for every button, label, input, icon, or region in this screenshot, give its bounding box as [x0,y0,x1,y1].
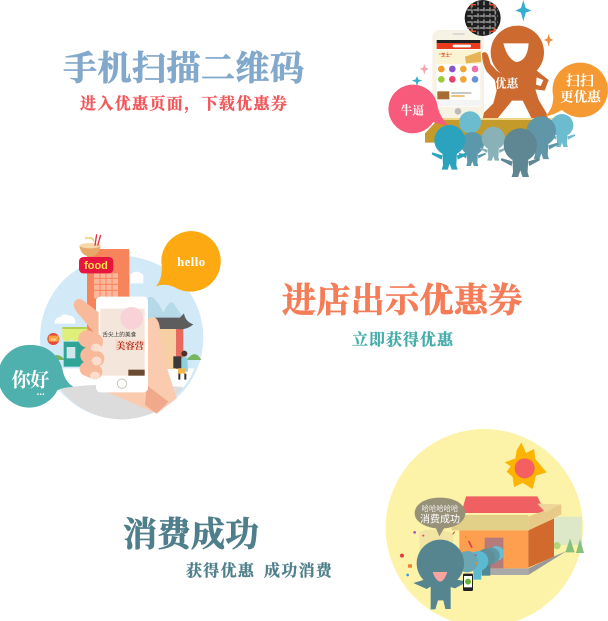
speech bubble: nihao: 你好 [11,369,50,391]
phone: check mark [463,574,473,591]
subtitle: step 3 [186,561,333,580]
speech bubble: orange: 更优惠 [560,88,602,104]
illustration: hand holding phone [0,231,221,419]
hand and phone [74,297,177,414]
building: tall orange [87,249,129,359]
speech bubble: hello: hello [177,255,206,269]
speech bubble: pink [388,85,448,133]
subtitle: step 3: 获得优惠 [186,561,256,580]
mascot: teal figure [413,540,467,609]
illustration: scan QR code crowd [388,0,608,177]
phone: "芝士" [439,52,452,59]
mascot: orange figure [482,26,549,119]
food sign [79,257,113,273]
speech bubble: success: 消费成功 [420,512,460,525]
sun [505,442,547,489]
speech bubble: nihao: ... [37,387,45,398]
white street band [49,368,194,388]
background circle [40,256,203,419]
icon: food bowl [79,234,101,257]
title: step 3: 消费成功 [123,516,259,554]
speech bubble: orange [545,63,608,117]
shop: left: bar [51,336,57,341]
store [452,496,567,575]
subtitle: step 2: 立即获得优惠 [352,330,455,349]
speech bubble: nihao [0,345,73,408]
confetti [400,531,478,576]
background circle [386,429,583,621]
QR code bubble [465,0,501,36]
speech bubble: success [415,498,465,536]
title: step 2: 进店出示优惠券 [282,282,523,320]
speech bubble: orange: 扫扫 [566,72,594,89]
queue of figures [457,546,504,580]
title: step 1: 手机扫描二维码 [63,50,304,88]
speech bubble: pink: 牛逼 [401,103,424,117]
city background [419,517,584,558]
clouds and mountains [50,272,201,360]
ground [60,385,183,419]
subtitle: step 3: 成功消费 [264,561,333,580]
hand and phone: 美容营 [116,340,145,352]
subtitle: step 1: 进入优惠页面，下载优惠券 [80,94,288,114]
shop: left [47,327,87,367]
stage [425,118,553,143]
icon: sparkles [412,0,553,86]
girl figure [173,351,188,380]
temple building: right [151,313,193,369]
mascot: orange figure: 优惠 [495,76,520,90]
speech bubble: hello [156,231,221,292]
illustration: payment success [386,429,584,621]
speech bubble: success: 哈哈哈哈哈 [422,504,459,513]
phone [432,30,484,119]
food sign: food [84,260,108,272]
hand and phone: 舌尖上的美食 [102,330,137,338]
crowd figures [432,111,575,177]
